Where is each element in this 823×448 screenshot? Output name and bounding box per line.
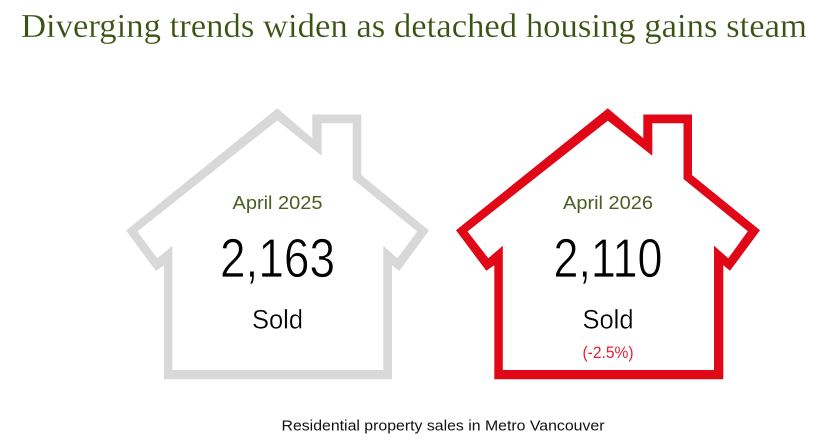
sold label: Sold [582,304,634,334]
date label: April 2025 [232,192,322,213]
caption: Residential property sales in Metro Vancouver [282,418,604,434]
sold label: Sold [252,304,303,334]
panel: April 2026 house [456,108,760,379]
date label: April 2026 [563,192,653,213]
sold count: 2,163 [220,227,335,289]
title: Diverging trends widen as detached housing gains steam [21,8,807,45]
percent change: (-2.5%) [582,344,634,362]
icon: red house outline [456,108,760,379]
panel: April 2025 house [126,108,429,379]
sold count: 2,110 [554,227,662,289]
icon: grey house outline [126,108,429,379]
